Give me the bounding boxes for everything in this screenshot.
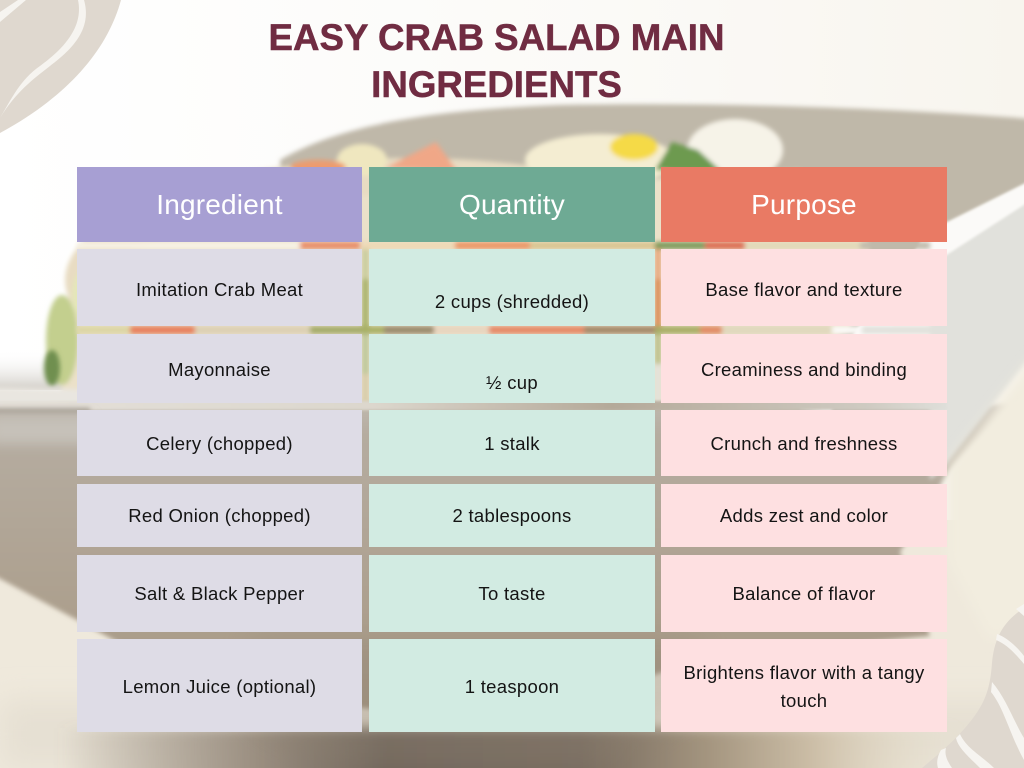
row 3: Celery: Celery (chopped) xyxy=(146,433,293,454)
bowl wall xyxy=(0,370,1024,725)
header: Purpose xyxy=(661,167,947,242)
decorative leaf: bottom right xyxy=(922,604,1024,768)
header: Ingredient: Ingredient xyxy=(156,189,283,220)
row 5: Salt & Black Pepper xyxy=(77,555,362,632)
row 3: Celery xyxy=(77,410,362,476)
row 2 quantity xyxy=(369,334,655,403)
salad colours visible in the gaps xyxy=(77,242,947,404)
title xyxy=(269,17,724,105)
row 4: Red Onion xyxy=(77,484,362,547)
bowl interior xyxy=(280,104,1024,410)
table xyxy=(0,520,1024,768)
row 6 purpose: touch xyxy=(781,690,827,711)
decorative leaf: top left xyxy=(0,0,121,133)
row 3 purpose xyxy=(661,410,947,476)
row 3 purpose: Crunch and freshness xyxy=(710,433,898,454)
row 2: Mayonnaise: Mayonnaise xyxy=(168,359,271,380)
row 1 quantity xyxy=(369,249,655,326)
row 2 purpose: Creaminess and binding xyxy=(701,359,907,380)
row 3 quantity: 1 stalk xyxy=(484,433,540,454)
row 6: Lemon Juice xyxy=(77,639,362,732)
header: Quantity xyxy=(369,167,655,242)
salad xyxy=(46,119,870,404)
row 1 quantity: 2 cups (shredded) xyxy=(435,291,589,312)
row 6 purpose: Brightens flavor with a tangy xyxy=(683,662,925,683)
right bowl outside xyxy=(930,180,1024,480)
row 4 quantity: 2 tablespoons xyxy=(452,505,572,526)
header: Purpose: Purpose xyxy=(751,189,857,220)
header: Ingredient xyxy=(77,167,362,242)
row 5 quantity xyxy=(369,555,655,632)
title: INGREDIENTS xyxy=(371,64,622,105)
rim front xyxy=(0,387,360,408)
row 6 quantity: 1 teaspoon xyxy=(465,676,559,697)
row 4 purpose: Adds zest and color xyxy=(720,505,888,526)
row 2 quantity: ½ cup xyxy=(486,372,538,393)
row 1 purpose xyxy=(661,249,947,326)
row 6 purpose xyxy=(661,639,947,732)
row 4 purpose xyxy=(661,484,947,547)
row 5 purpose xyxy=(661,555,947,632)
row 1 purpose: Base flavor and texture xyxy=(705,279,903,300)
row 1: Imitation Crab Meat xyxy=(77,249,362,326)
row 6 quantity xyxy=(369,639,655,732)
row 5 purpose: Balance of flavor xyxy=(733,583,875,604)
row 2 purpose xyxy=(661,334,947,403)
row 5 quantity: To taste xyxy=(478,583,546,604)
row 2: Mayonnaise xyxy=(77,334,362,403)
row 1: Imitation Crab Meat: Imitation Crab Meat xyxy=(136,279,303,300)
header: Quantity: Quantity xyxy=(459,189,565,220)
row 6: Lemon Juice: Lemon Juice (optional) xyxy=(123,676,316,697)
row 4 quantity xyxy=(369,484,655,547)
left shading above rim xyxy=(0,350,90,390)
row 4: Red Onion: Red Onion (chopped) xyxy=(128,505,311,526)
title: EASY CRAB SALAD MAIN xyxy=(269,17,724,58)
row 5: Salt & Black Pepper: Salt & Black Pepper xyxy=(134,583,305,604)
row 3 quantity xyxy=(369,410,655,476)
